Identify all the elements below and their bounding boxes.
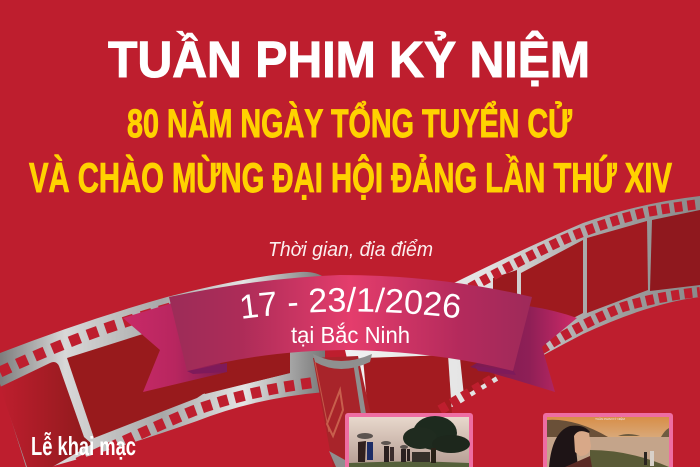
date: 17 - 23/1/2026: [242, 286, 460, 319]
photo card: film still with woman at sea: TUẦN PHIM KỶ NIỆM: [595, 416, 625, 421]
ribbon: right tail: [470, 306, 577, 392]
time and place label: Thời gian, địa điểm: [268, 239, 433, 261]
opening ceremony label: Lễ khai mạc: [31, 431, 136, 461]
film strip: left section: [0, 272, 325, 467]
film strip: right section: [345, 196, 700, 414]
title: TUẦN PHIM KỶ NIỆM: [108, 30, 590, 88]
photo card: film still with tree: [345, 413, 473, 467]
ribbon: left tail: [123, 303, 227, 392]
location: tại Bắc Ninh: [291, 322, 410, 348]
subtitle: [29, 99, 672, 201]
ribbon: main banner: [169, 275, 532, 371]
photo card: film still with woman at sea: [543, 413, 673, 467]
film strip: curled centre: [313, 354, 372, 467]
